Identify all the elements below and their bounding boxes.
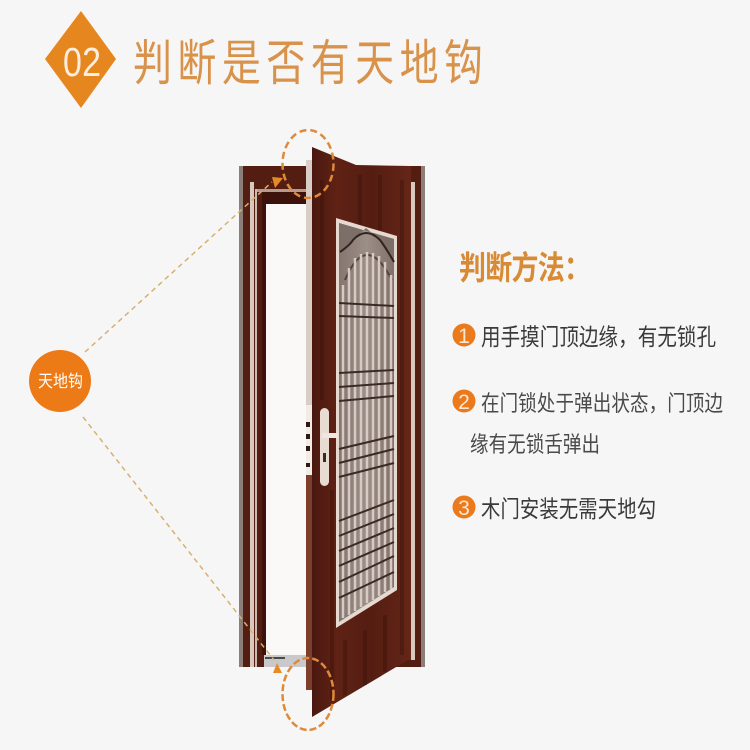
door glass panel	[336, 218, 397, 628]
step 2	[452, 390, 723, 457]
door handle and lock	[320, 408, 338, 486]
callout: 天地钩	[29, 350, 91, 412]
arrow: top pointer	[85, 177, 283, 352]
callout: 天地钩: 天地钩	[38, 372, 83, 391]
door opening	[266, 204, 308, 655]
lock bolts on door edge	[306, 422, 310, 467]
heading badge: 02: 02	[63, 39, 101, 85]
method heading: 判断方法：	[459, 251, 591, 287]
step 1: 用手摸门顶边缘，有无锁孔	[481, 324, 716, 350]
title: 判断是否有天地钩	[133, 37, 483, 91]
door frame	[239, 166, 425, 667]
door edge	[306, 160, 312, 690]
dashed circle: bottom hook	[282, 658, 334, 730]
door panel grooves	[322, 175, 402, 700]
step 2: 缘有无锁舌弹出	[470, 432, 600, 457]
dashed circle: top hook	[282, 130, 334, 198]
step 3: 木门安装无需天地勾	[481, 496, 656, 522]
step 1: 1	[458, 325, 470, 348]
heading badge: 02	[45, 11, 116, 108]
step 2: 2	[458, 391, 470, 414]
step 2: 在门锁处于弹出状态，门顶边	[481, 391, 723, 416]
door leaf	[312, 147, 411, 717]
arrow: bottom pointer	[83, 417, 282, 673]
step 3: 3	[458, 497, 470, 520]
